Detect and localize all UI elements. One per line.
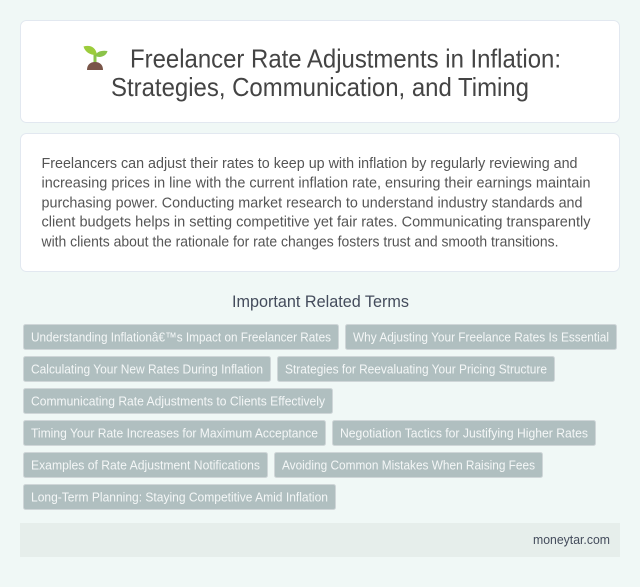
tag 2 [346,324,616,350]
tag 4 [278,356,554,382]
tag 6 [24,420,326,446]
icon: seedling [84,46,108,70]
panel: summary paragraph [20,134,620,272]
heading: important related terms: Important Related Terms [232,293,409,311]
tag 8 [24,452,268,478]
title text: Strategies, Communication, and Timing [111,72,529,102]
title text [111,44,561,102]
tag list [24,324,616,510]
tag 7: Negotiation Tactics for Justifying Higher Rates [340,426,588,440]
title text: Freelancer Rate Adjustments in Inflation: [130,44,561,74]
paragraph text: purchasing power. Conducting market research to understand industry standards and [42,194,582,212]
tag 7 [332,420,596,446]
tag 5 [24,388,332,414]
paragraph text: increasing prices in line with the current inflation rate, ensuring their earnings maintain [42,174,590,192]
tag 8: Examples of Rate Adjustment Notifications [31,458,260,472]
tag 3 [24,356,270,382]
panel: title card [20,20,620,122]
paragraph text [41,155,591,250]
paragraph text: client budgets helps in setting competitive yet fair rates. Communicating transparently [42,214,591,230]
paragraph text: with clients about the rationale for rate changes fosters trust and smooth transitions. [41,234,559,250]
tag 10 [24,484,336,510]
tag 4: Strategies for Reevaluating Your Pricing Structure [285,362,547,376]
tag 1 [24,324,338,350]
tag 3: Calculating Your New Rates During Inflation [31,362,263,376]
footer [20,523,620,557]
tag 6: Timing Your Rate Increases for Maximum Acceptance [31,426,318,440]
tag 2: Why Adjusting Your Freelance Rates Is Essential [353,330,609,344]
tag 9: Avoiding Common Mistakes When Raising Fees [282,458,535,472]
paragraph text: Freelancers can adjust their rates to keep up with inflation by regularly reviewing and [42,155,578,172]
tag 1: Understanding Inflationâ€™s Impact on Freelancer Rates [31,330,331,344]
tag 10: Long-Term Planning: Staying Competitive Amid Inflation [31,490,328,504]
tag 5: Communicating Rate Adjustments to Clients Effectively [31,394,325,408]
footer source: moneytar.com [533,532,610,547]
tag 9 [274,452,542,478]
